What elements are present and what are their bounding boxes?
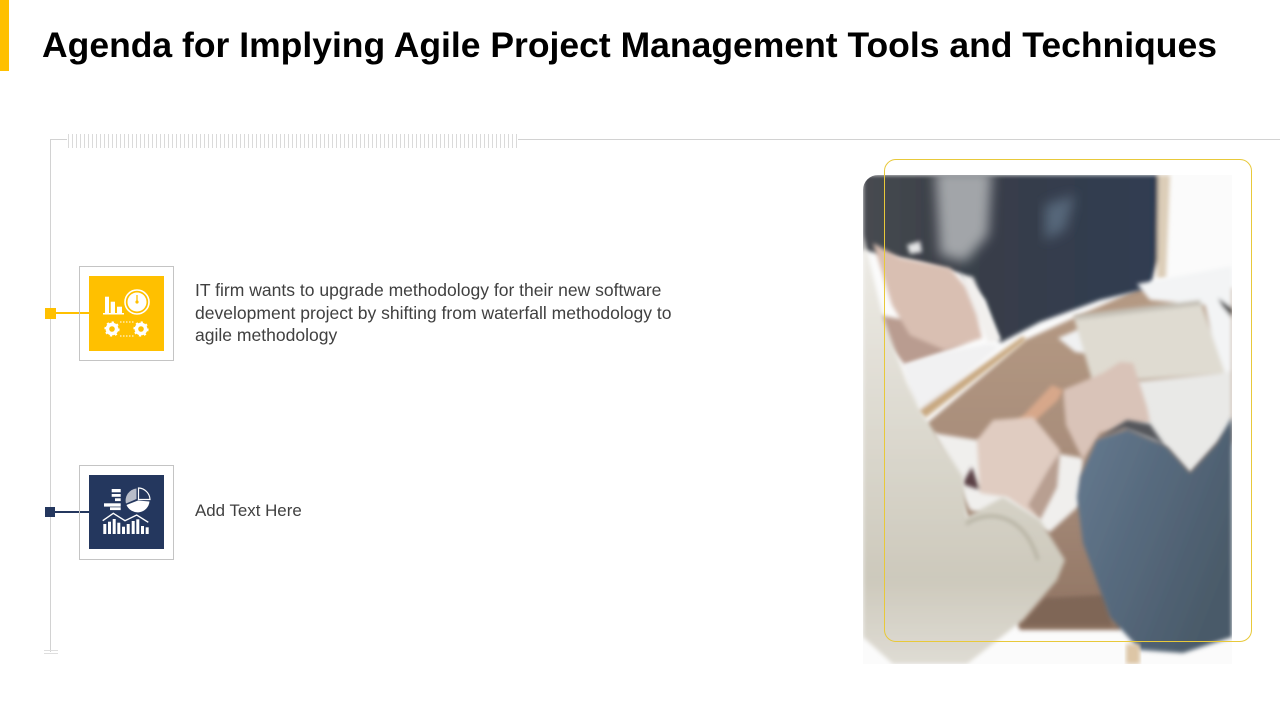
photo: business people at a table: [863, 175, 1232, 664]
seated hands: [873, 241, 1001, 365]
icon box 1: [79, 266, 174, 361]
connector 1: [45, 308, 89, 319]
dark suit: [863, 175, 1170, 343]
item 1 text: IT firm wants to upgrade methodology for their new software: [195, 280, 661, 300]
photo background: [863, 175, 1232, 664]
writing hand: [962, 417, 1060, 520]
yellow outline frame: [884, 159, 1252, 642]
icon: chart, gauge and gears: [89, 276, 164, 351]
agenda item 2: [45, 465, 302, 560]
right hand: [1063, 362, 1150, 460]
left paper and board: [903, 336, 1026, 418]
agenda item 1: [45, 266, 672, 361]
item 1 text: [195, 280, 672, 345]
table: [925, 288, 1232, 630]
shirt: [935, 170, 992, 262]
item 2 text: Add Text Here: [195, 501, 302, 520]
item 1 text: development project by shifting from waterfall methodology to: [195, 302, 672, 322]
table front edge: [1020, 595, 1112, 626]
beige sleeve: [863, 235, 1065, 664]
timeline frame: [44, 134, 1280, 654]
white papers: [933, 266, 1232, 532]
lapel highlight: [1045, 195, 1075, 240]
icon: bars, pie and line chart: [89, 475, 164, 549]
accent bar: [0, 0, 9, 71]
title: Agenda for Implying Agile Project Management Tools and Techniques: [42, 25, 1217, 65]
blue sleeve: [1077, 417, 1232, 653]
table leg: [1126, 644, 1140, 664]
icon box 2: [79, 465, 174, 560]
connector 2: [45, 507, 89, 517]
sleeve cuff shadow: [966, 516, 1038, 560]
item 1 text: agile methodology: [195, 325, 337, 345]
pen: [1020, 384, 1063, 421]
